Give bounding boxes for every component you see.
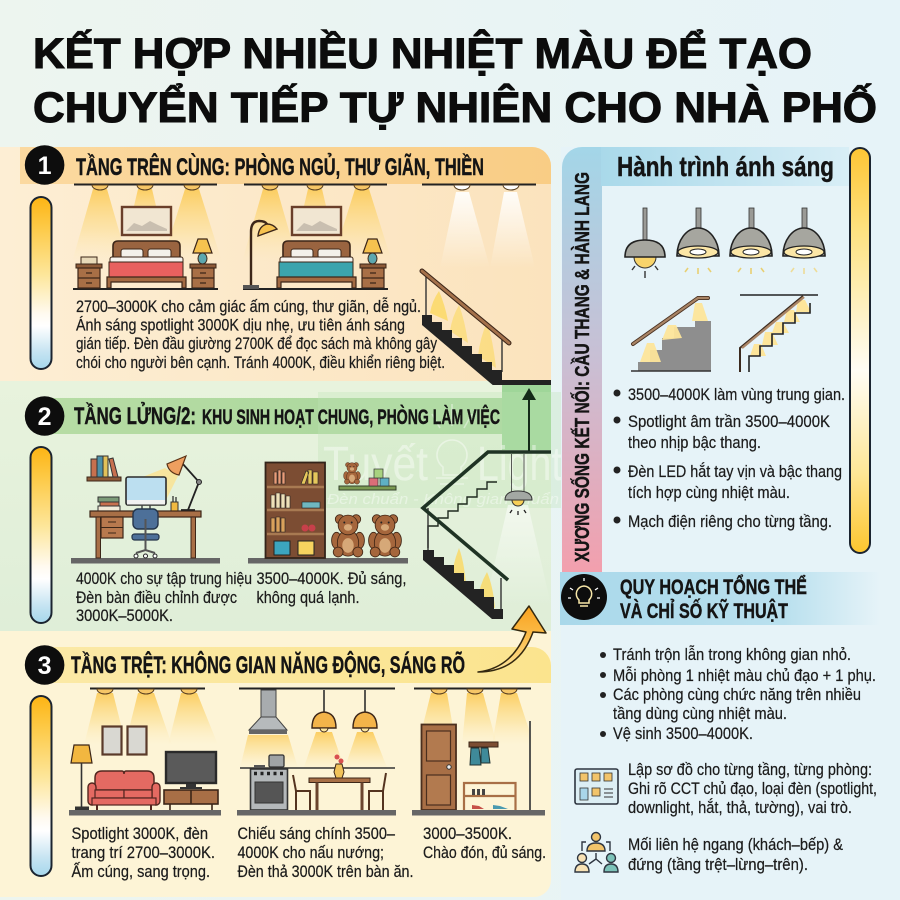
colour temperature bar xyxy=(30,197,52,369)
heading band: ground floor xyxy=(45,647,551,683)
illustration: kitchen and dining xyxy=(237,688,396,816)
list: spine bullets: theo nhịp bậc thang. xyxy=(628,433,761,452)
text block: floor plan: downlight, hắt, thả, tường), vai trò. xyxy=(628,798,852,817)
text block: entry xyxy=(423,824,546,862)
text block: living room: trang trí 2700–3000K. xyxy=(72,843,215,862)
text block: desk: Đèn bàn điều chỉnh được xyxy=(76,588,237,607)
heading band xyxy=(601,147,849,186)
colour temperature bar xyxy=(850,148,870,553)
panel: ground floor xyxy=(25,606,551,881)
number badge 1 xyxy=(25,145,64,185)
watermark text: Đèn chuẩn - Không gian chuẩn xyxy=(327,491,559,508)
text block: kitchen: 4000K cho nấu nướng; xyxy=(238,843,384,862)
arrow: upward between floors xyxy=(522,388,536,451)
heading: overall planning: QUY HOẠCH TỔNG THỂ xyxy=(620,575,807,599)
heading: overall planning: VÀ CHỈ SỐ KỸ THUẬT xyxy=(620,599,788,623)
list: planning bullets: Các phòng cùng chức năng trên nhiều xyxy=(613,685,861,704)
list: spine bullets xyxy=(614,385,845,531)
text block: living room: Ấm cúng, sang trọng. xyxy=(72,862,210,881)
icon: people connection xyxy=(575,832,618,872)
heading: mezzanine xyxy=(74,401,500,430)
heading: top floor: TẦNG TRÊN CÙNG: PHÒNG NGỦ, THƯ GIÃN, THIỀN xyxy=(76,152,484,181)
watermark text xyxy=(323,404,582,508)
icon: light bulb badge xyxy=(561,574,607,620)
text block: top floor xyxy=(76,297,445,372)
icon: pendant with bulb xyxy=(625,208,665,278)
illustration: floor lamp xyxy=(243,221,277,289)
panel: right column background xyxy=(561,147,900,900)
heading band: mezzanine xyxy=(50,398,502,434)
vertical heading: XƯƠNG SỐNG KẾT NỐI: CẦU THANG & HÀNH LANG xyxy=(570,172,594,562)
arrow: curved yellow xyxy=(478,606,546,672)
list: spine bullets: Spotlight âm trần 3500–4000K xyxy=(628,412,830,431)
text block: desk: 4000K cho sự tập trung hiệu xyxy=(76,569,252,588)
illustration: bedroom with red bedding xyxy=(72,184,222,289)
heading band xyxy=(560,572,880,625)
text block: floor plan: Lập sơ đồ cho từng tầng, từng phòng: xyxy=(628,760,872,779)
text block: kitchen: Đèn thả 3000K trên bàn ăn. xyxy=(238,862,414,881)
text block: shelf: 3500–4000K. Đủ sáng, xyxy=(256,569,406,588)
text block: shelf xyxy=(256,569,406,607)
number badge 1: 1 xyxy=(38,152,52,180)
title: KẾT HỢP NHIỀU NHIỆT MÀU ĐỂ TẠO xyxy=(33,29,812,78)
list: spine bullets: 3500–4000K làm vùng trung gian. xyxy=(628,385,845,404)
heading: overall planning xyxy=(620,575,807,623)
illustration: middle staircase with pendant xyxy=(423,452,551,619)
text block: kitchen xyxy=(238,824,414,881)
colour temperature bar xyxy=(30,696,52,876)
text block: relations: đứng (tầng trệt–lừng–trên). xyxy=(628,855,808,874)
number badge 3: 3 xyxy=(38,652,52,680)
heading: mezzanine: TẦNG LỬNG/2: xyxy=(74,401,196,430)
title: CHUYỂN TIẾP TỰ NHIÊN CHO NHÀ PHỐ xyxy=(33,83,877,132)
number badge 3 xyxy=(25,645,64,685)
icon: floor plan board xyxy=(575,769,618,804)
heading: light journey: Hành trình ánh sáng xyxy=(617,151,834,182)
heading band right block xyxy=(502,381,551,450)
watermark text: Lights xyxy=(477,438,582,491)
list: planning bullets xyxy=(600,645,876,743)
illustration: study desk xyxy=(71,456,220,564)
list: planning bullets: tầng dùng cùng nhiệt màu. xyxy=(613,704,787,723)
title xyxy=(33,29,877,132)
illustration: white spotlights xyxy=(422,184,536,268)
list: planning bullets: Tránh trộn lẫn trong không gian nhỏ. xyxy=(613,645,851,664)
text block: living room: Spotlight 3000K, đèn xyxy=(72,824,208,843)
number badge 2: 2 xyxy=(38,403,52,431)
icon: stair with ceiling line xyxy=(740,295,818,372)
text block: relations: Mối liên hệ ngang (khách–bếp) & xyxy=(628,835,843,854)
text block: entry: 3000–3500K. xyxy=(423,824,512,843)
illustration: entry hall xyxy=(412,688,545,816)
list: spine bullets: tích hợp cùng nhiệt màu. xyxy=(628,483,790,502)
colour temperature bar xyxy=(30,447,52,623)
text block: top floor: 2700–3000K cho cảm giác ấm cúng, thư giãn, dễ ngủ. xyxy=(76,297,421,316)
panel: connecting spine xyxy=(562,147,870,575)
watermark text: Tuyết xyxy=(323,438,428,491)
text block: top floor: gián tiếp. Đèn đầu giường 2700K để đọc sách mà không gây xyxy=(76,334,438,353)
illustration: upper staircase xyxy=(422,271,551,385)
text block: desk xyxy=(76,569,252,625)
list: spine bullets: Đèn LED hắt tay vịn và bậc thang xyxy=(628,462,842,481)
heading band: top floor xyxy=(20,147,551,184)
heading: ground floor: TẦNG TRỆT: KHÔNG GIAN NĂNG ĐỘNG, SÁNG RÕ xyxy=(71,651,465,679)
panel: mezzanine background xyxy=(0,381,551,631)
panel: ground floor background xyxy=(0,631,551,897)
text block: kitchen: Chiếu sáng chính 3500– xyxy=(238,824,396,843)
text block: entry: Chào đón, đủ sáng. xyxy=(423,843,546,862)
text block: desk: 3000K–5000K. xyxy=(76,606,173,625)
text block: top floor: Ánh sáng spotlight 3000K dịu nhẹ, ưu tiên ánh sáng xyxy=(76,316,405,334)
illustration: bedside table with books xyxy=(76,257,102,288)
number badge 2 xyxy=(25,396,64,436)
text block: floor plan xyxy=(628,760,877,817)
icon: stair with handrail light xyxy=(631,298,711,371)
text block: shelf: không quá lạnh. xyxy=(256,588,360,607)
illustration: bookshelf, toys and teddies xyxy=(248,462,408,564)
icon: dome spotlights xyxy=(677,208,825,274)
vertical strip xyxy=(562,147,602,575)
text block: top floor: chói cho người bên cạnh. Tránh 4000K, điều khiển riêng biệt. xyxy=(76,353,445,372)
watermark block xyxy=(318,392,580,508)
panel: overall planning xyxy=(560,572,880,874)
panel: mezzanine xyxy=(25,388,551,625)
list: planning bullets: Vệ sinh 3500–4000K. xyxy=(613,724,753,743)
panel: top floor xyxy=(20,145,551,385)
list: spine bullets: Mạch điện riêng cho từng tầng. xyxy=(628,512,832,531)
text block: relations xyxy=(628,835,843,874)
illustration: living room xyxy=(69,688,221,816)
illustration: bedroom with teal bedding xyxy=(242,184,392,289)
panel: top floor background xyxy=(0,147,551,381)
heading: mezzanine: KHU SINH HOẠT CHUNG, PHÒNG LÀM VIỆC xyxy=(202,405,500,429)
text block: living room xyxy=(72,824,215,881)
